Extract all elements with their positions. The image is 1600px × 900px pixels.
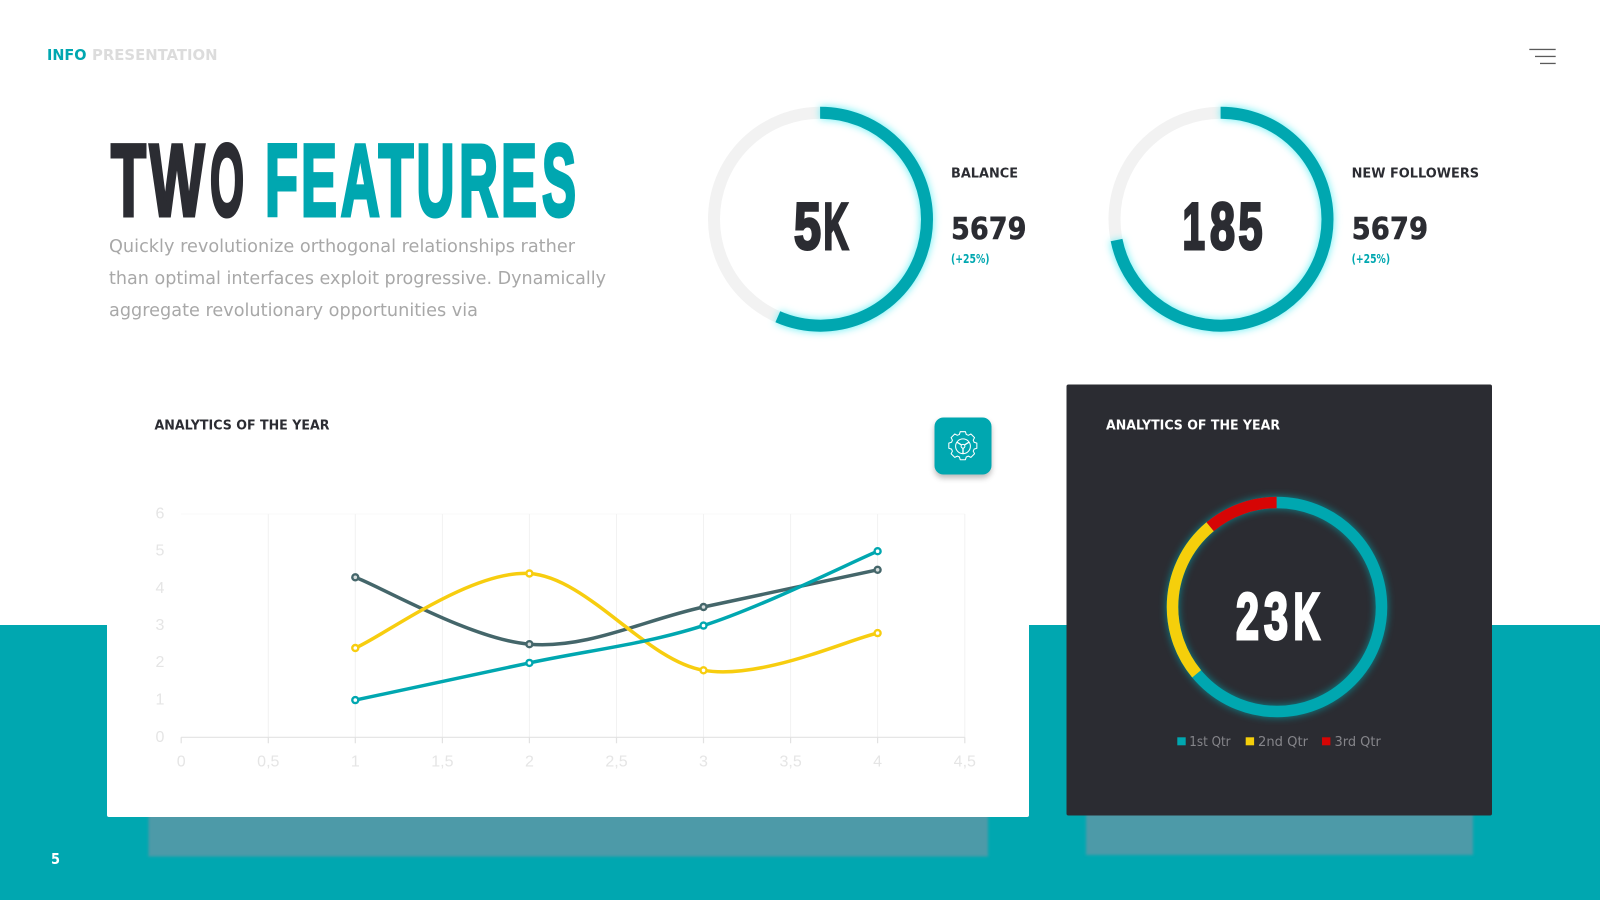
x axis labels: 4 xyxy=(873,754,882,770)
x axis labels xyxy=(177,754,976,770)
x axis labels: 1 xyxy=(351,754,360,770)
stat: balance: BALANCE xyxy=(951,166,1018,182)
stat: balance xyxy=(951,166,1026,266)
description text block: than optimal interfaces exploit progressive. Dynamically xyxy=(109,269,606,289)
heading: ANALYTICS OF THE YEAR xyxy=(154,418,330,434)
heading: ANALYTICS OF THE YEAR xyxy=(1106,418,1281,434)
panel: dark donut card xyxy=(1066,384,1492,816)
stat: balance: (+25%) xyxy=(951,252,990,266)
x axis labels: 0 xyxy=(177,754,186,770)
y axis labels xyxy=(156,506,165,746)
title: E xyxy=(501,124,537,238)
donut chart xyxy=(1172,502,1382,712)
title: F xyxy=(265,124,298,238)
title: T xyxy=(378,124,414,238)
value: 5K: K xyxy=(824,189,849,263)
stat: new followers: 5679 xyxy=(1352,212,1428,247)
y axis labels: 3 xyxy=(156,617,165,634)
value: 185: 8 xyxy=(1210,189,1235,263)
y axis labels: 2 xyxy=(156,654,165,671)
page number: 5 xyxy=(51,850,60,868)
value: 23K: 3 xyxy=(1264,579,1288,653)
value: 185: 5 xyxy=(1238,189,1262,263)
x axis labels: 4,5 xyxy=(954,754,976,770)
icon: hamburger menu xyxy=(1529,49,1556,64)
y axis labels: 0 xyxy=(156,729,165,746)
title xyxy=(111,124,576,238)
y axis labels: 1 xyxy=(156,692,165,708)
x axis labels: 0,5 xyxy=(257,754,280,770)
panel: line chart xyxy=(107,385,1029,817)
title: R xyxy=(459,124,498,238)
teal background band xyxy=(0,625,1600,900)
title: A xyxy=(341,124,380,238)
y axis labels: 5 xyxy=(156,542,165,560)
panel shadow: chart xyxy=(148,812,988,856)
x axis labels: 3,5 xyxy=(779,754,802,770)
title: O xyxy=(210,124,244,238)
legend: 1st Qtr xyxy=(1189,735,1231,750)
x axis labels: 3 xyxy=(699,754,708,770)
y axis labels: 6 xyxy=(156,506,165,522)
x axis labels: 1,5 xyxy=(431,754,454,770)
description text block xyxy=(109,237,606,321)
stat: balance: 5679 xyxy=(951,212,1026,247)
line series: yellow xyxy=(352,570,881,673)
line series: dark xyxy=(352,567,881,647)
value: 185: 1 xyxy=(1182,189,1205,263)
line series: teal xyxy=(352,548,881,703)
header brand label: INFO xyxy=(47,46,86,64)
donut: balance xyxy=(714,113,927,326)
donut: new followers xyxy=(1114,113,1328,326)
y axis labels: 4 xyxy=(156,580,165,597)
x axis labels: 2,5 xyxy=(605,754,628,770)
stat: new followers: NEW FOLLOWERS xyxy=(1352,166,1479,182)
legend: 2nd Qtr xyxy=(1258,735,1309,750)
stat: new followers: (+25%) xyxy=(1352,252,1390,266)
stat: new followers xyxy=(1352,166,1479,266)
description text block: Quickly revolutionize orthogonal relationships rather xyxy=(109,237,576,257)
value: 23K: K xyxy=(1294,579,1320,653)
title: W xyxy=(150,124,205,238)
panel shadow: dark card xyxy=(1086,810,1473,855)
legend: 3rd Qtr xyxy=(1334,735,1381,750)
value: 23K: 2 xyxy=(1236,579,1259,653)
title: T xyxy=(111,124,146,238)
description text block: aggregate revolutionary opportunities via xyxy=(109,301,478,321)
title: E xyxy=(301,124,337,238)
x axis labels: 2 xyxy=(525,754,534,770)
header brand label: PRESENTATION xyxy=(92,46,218,64)
title: U xyxy=(416,124,454,238)
chart gridlines and axes xyxy=(181,514,965,743)
text: S xyxy=(542,124,576,238)
value: 5K: 5 xyxy=(794,189,821,263)
icon: gear button xyxy=(934,418,992,478)
legend xyxy=(1177,735,1381,750)
